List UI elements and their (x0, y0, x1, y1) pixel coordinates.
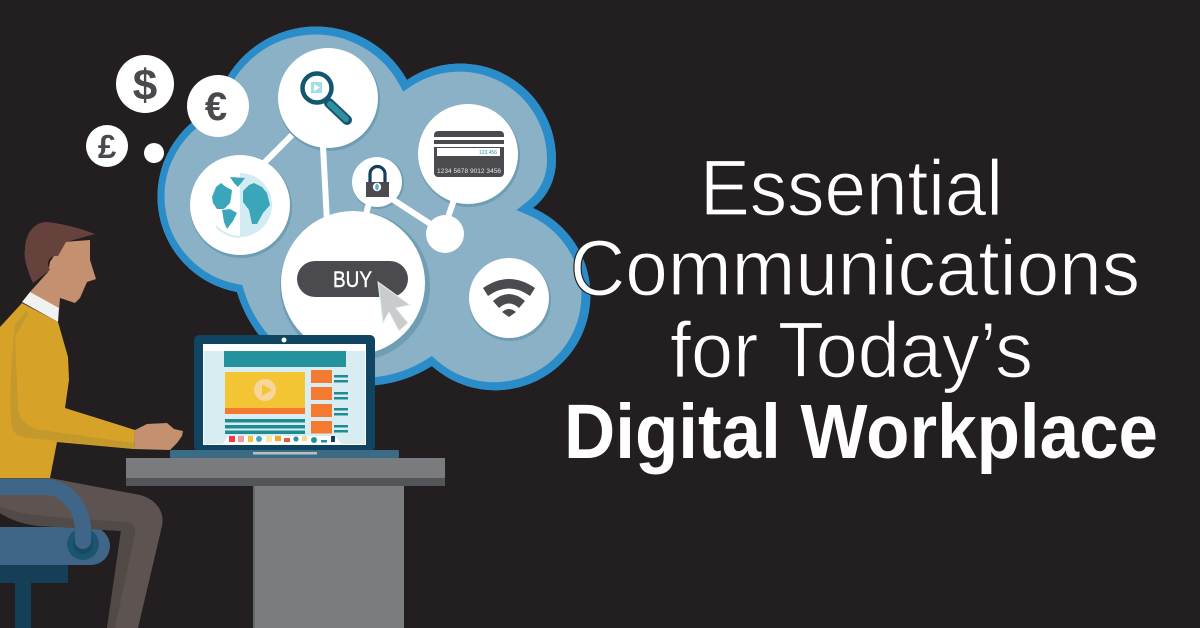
app dock (222, 436, 342, 445)
title line 3: for Today’s (670, 305, 1033, 394)
person (0, 222, 183, 628)
icon: pound coin (86, 125, 128, 167)
icon: wifi (469, 258, 549, 338)
desk (126, 458, 445, 628)
icon: dollar coin: $ (133, 61, 157, 110)
neck and face (30, 240, 96, 310)
chair (0, 527, 110, 628)
title line 4: Digital Workplace (564, 389, 1158, 475)
icon: magnifying glass (278, 48, 378, 148)
thought bubble dot (144, 143, 164, 163)
video player (225, 372, 305, 414)
circle shadows (190, 49, 551, 361)
icon: buy button (281, 211, 425, 355)
icon: euro coin (187, 75, 249, 137)
hand (134, 423, 183, 450)
icon: euro coin: € (205, 85, 227, 129)
sweater (0, 303, 135, 478)
icon: credit card: 123 456 (479, 150, 497, 156)
icon: dollar coin (116, 55, 174, 113)
trousers (0, 478, 163, 628)
icon: pound coin: £ (98, 128, 117, 165)
sidebar lines (334, 375, 348, 432)
icon: buy button: BUY (333, 267, 372, 292)
title line 1: Essential (700, 143, 1003, 232)
text lines (225, 419, 305, 434)
title (564, 143, 1158, 475)
icon: credit card (418, 104, 518, 204)
sidebar thumbnails (311, 370, 332, 434)
icon: credit card: 1234 5678 9012 3456 (437, 168, 501, 175)
title line 2: Communications (570, 223, 1140, 312)
icon: padlock (352, 157, 402, 207)
icon: globe (190, 155, 290, 255)
screen header bar (224, 351, 346, 367)
network connectors (262, 135, 454, 225)
chair arm (0, 487, 99, 560)
collar (22, 292, 59, 322)
icon: cursor (378, 282, 410, 331)
laptop (170, 335, 399, 458)
network node (426, 215, 464, 253)
cloud (157, 27, 590, 390)
hair (24, 222, 95, 283)
